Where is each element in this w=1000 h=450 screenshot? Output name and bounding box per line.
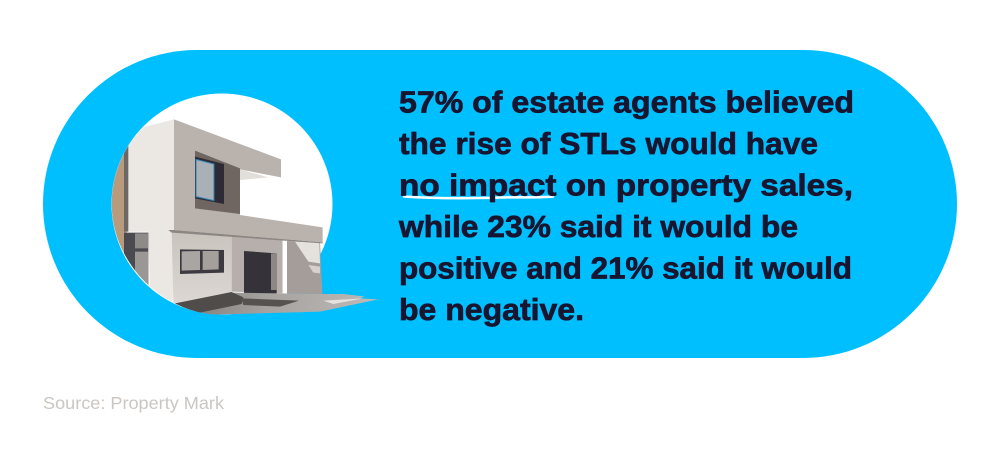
icon: white circle behind house <box>112 94 332 314</box>
icon: modern house illustration <box>110 119 378 315</box>
text block: main statistic: be negative. <box>399 292 584 327</box>
text block: main statistic: the rise of STLs would have <box>399 126 818 161</box>
highlight: white underline under no impact <box>404 196 553 198</box>
text block: main statistic: while 23% said it would be <box>398 209 798 244</box>
panel: blue pill background <box>43 50 957 358</box>
text block: main statistic: positive and 21% said it would <box>399 250 852 286</box>
text block: main statistic: no impact on property sales, <box>399 168 853 202</box>
text block: main statistic: 57% of estate agents believed <box>399 84 854 120</box>
source note: Source: Property Mark <box>43 393 224 413</box>
text block: main statistic <box>398 84 854 327</box>
